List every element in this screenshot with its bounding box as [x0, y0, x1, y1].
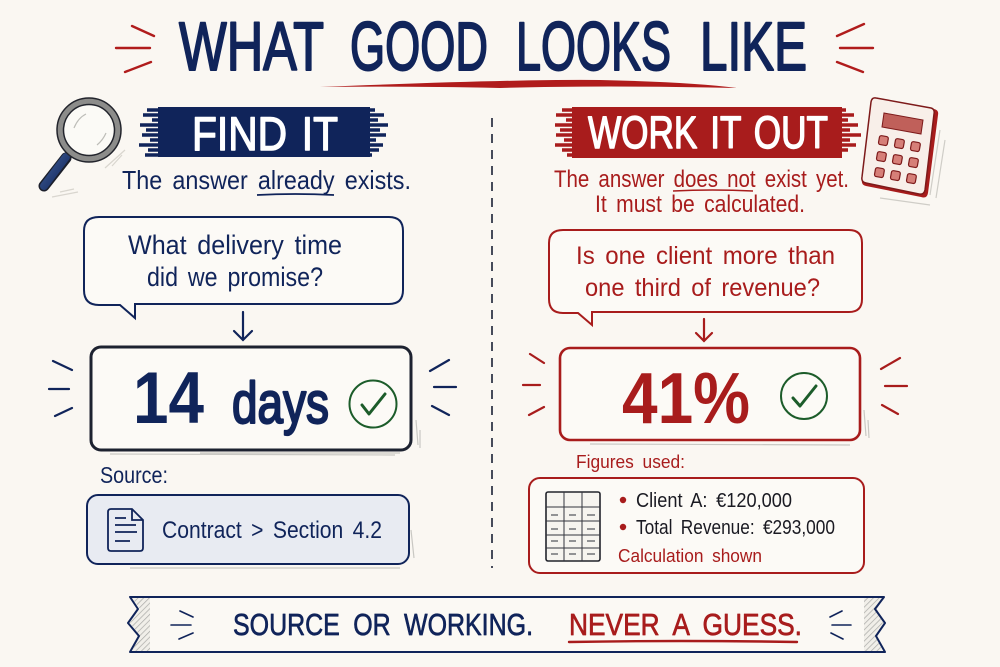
decorative divider [491, 118, 493, 568]
banner: source or working [128, 597, 885, 652]
figures list: Total Revenue: €293,000 [636, 517, 835, 539]
icon: magnifying glass [44, 98, 125, 197]
panel: find it [36, 96, 460, 571]
panel: work it out [520, 95, 945, 577]
heading: work it out: WORK IT OUT [588, 107, 828, 158]
title: GOOD [350, 8, 488, 85]
figures list [620, 490, 835, 539]
emphasis rays [523, 354, 907, 415]
figures list: Client A: €120,000 [636, 490, 792, 512]
answer box: 41%: 41% [622, 359, 750, 439]
answer box: 14 days: 14 [133, 358, 204, 439]
title: LOOKS [516, 8, 671, 85]
subheading: the answer does not exist yet: It must be calculated. [595, 191, 805, 218]
subheading: the answer does not exist yet [554, 166, 849, 218]
icon: check mark [350, 380, 396, 428]
icon: calculator [862, 98, 945, 205]
heading: find it [139, 107, 388, 160]
figures used label: Figures used: [576, 452, 685, 472]
heading: find it: FIND IT [192, 107, 338, 160]
title [116, 8, 873, 88]
arrow [696, 319, 712, 341]
icon: table [546, 492, 600, 561]
answer box: 14 days: days [232, 371, 329, 436]
source box: Contract > Section 4.2 [162, 517, 382, 544]
subheading: the answer already exists: The answer already exists. [122, 165, 411, 195]
question bubble: one third of revenue? [585, 274, 820, 302]
banner: source or working: SOURCE OR WORKING. [233, 607, 533, 642]
source label: Source: [100, 462, 168, 488]
title: LIKE [700, 8, 807, 85]
banner: source or working: NEVER A GUESS. [569, 607, 802, 642]
question bubble: What delivery time [128, 230, 342, 260]
figures box [529, 478, 864, 573]
icon: check mark [781, 373, 827, 419]
emphasis rays [49, 360, 456, 416]
question bubble [549, 230, 862, 325]
source box [87, 495, 414, 568]
title: WHAT [179, 8, 324, 85]
answer box: 14 days [91, 347, 420, 455]
answer box: 41% [560, 348, 869, 445]
question bubble [84, 217, 403, 318]
question bubble: did we promise? [147, 262, 323, 292]
subheading: the answer does not exist yet: The answer does not exist yet. [554, 166, 849, 193]
arrow [234, 312, 252, 340]
question bubble: Is one client more than [576, 242, 835, 270]
icon: document [108, 509, 143, 551]
calculation shown note: Calculation shown [618, 546, 762, 566]
